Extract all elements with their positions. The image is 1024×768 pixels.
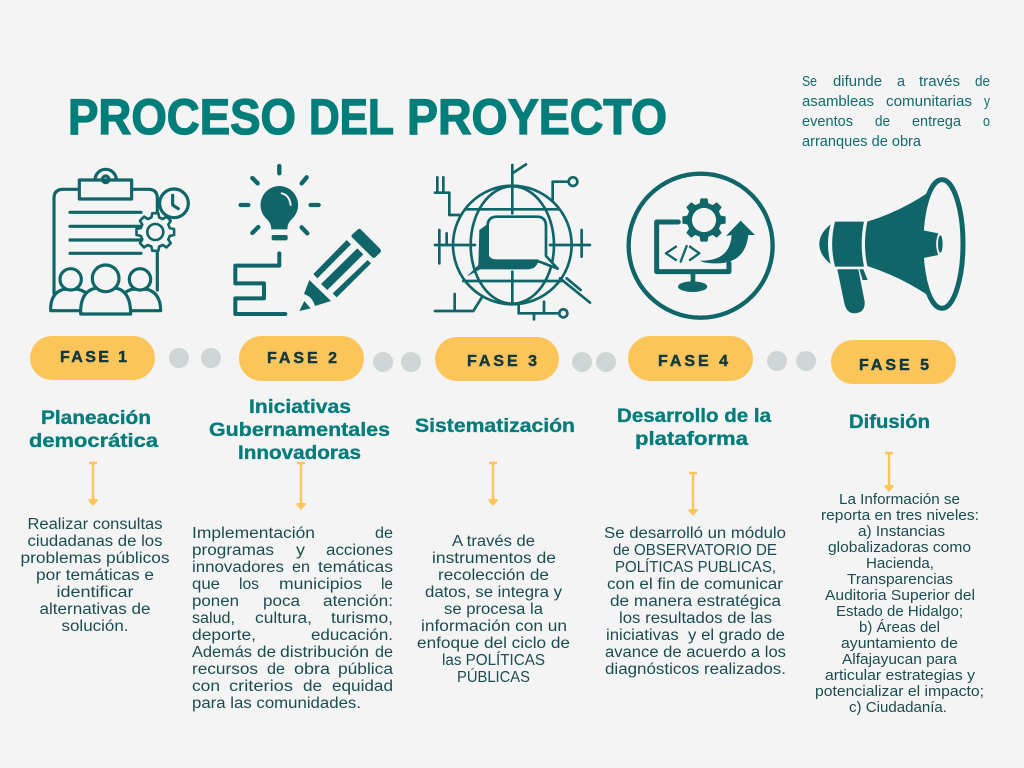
title: PROYECTO [407,89,667,145]
text block: fase 5 description: globalizadoras como [828,540,971,556]
heading: planeación democrática: democrática [29,430,158,452]
text block: fase 5 description: b) Áreas del [859,619,940,636]
text block: fase 2 description: pública [338,661,393,678]
panel: fase 3 [415,337,575,686]
heading: iniciativas gubernamentales innovadoras [209,396,390,464]
text block: fase 2 description: los [239,576,259,593]
text block: fase 4 description: iniciativas y el grado de [606,627,785,644]
text block: fase 1 description: alternativas de [40,601,150,618]
text block: fase 1 description: ciudadanas de los [28,533,163,550]
icon: clipboard with people [51,169,188,314]
text block: fase 3 description: datos, se integra y [425,584,562,601]
text block: fase 2 description: temáticas [318,559,393,576]
heading: desarrollo de la plataforma: Desarrollo de la [617,405,771,427]
text block: fase 4 description: diagnósticos realizados. [605,661,786,678]
text block: fase 2 description: para las comunidades. [192,695,361,712]
text block: difusión note: de [875,114,890,130]
heading: iniciativas gubernamentales innovadoras: Gubernamentales [209,419,390,441]
text block: fase 5 description: articular estrategias y [825,668,976,684]
panel: fase 4 [604,336,786,678]
heading: planeación democrática: Planeación [41,407,151,429]
text block: fase 4 description: POLÍTICAS PUBLICAS, [615,559,776,576]
text block: fase 2 description: y [296,542,305,559]
text block: fase 5 description: ayuntamiento de [841,636,958,652]
text block: fase 5 description: La Información se [839,492,960,508]
panel: fase 5 [815,340,984,716]
pill: fase 5: FASE 5 [859,357,929,374]
pill: fase 3: FASE 3 [467,353,537,370]
heading: sistematización: Sistematización [415,415,575,437]
title [68,89,667,145]
text block: fase 2 description: de [375,525,393,542]
heading: planeación democrática [29,407,158,452]
text block: fase 2 description: poca [263,593,300,610]
text block: fase 2 description: cultura, [255,610,312,627]
text block: fase 3 description: información con un [421,618,567,635]
text block: difusión note: entrega [912,114,962,130]
title: DEL [309,89,394,145]
icon: monitor with gear in a circle [629,174,773,318]
text block: fase 3 description [417,533,570,686]
text block: difusión note: a [897,74,906,90]
text block: fase 5 description: Hacienda, [866,556,934,572]
text block: fase 2 description: salud, [192,610,235,627]
text block: fase 2 description: que [192,576,220,593]
text block: difusión note: Se [802,74,817,90]
text block: difusión note: difunde [833,74,882,90]
text block: fase 2 description: Además [192,644,252,661]
text block: fase 2 description: innovadores [192,559,284,576]
heading: difusión: Difusión [849,411,930,433]
phase connector dots [169,348,816,372]
text block: fase 2 description: de [375,644,393,661]
text block: difusión note: través [919,74,960,90]
text block: difusión note: asambleas [802,94,874,110]
text block: fase 2 description: recursos [192,661,258,678]
heading: desarrollo de la plataforma [617,405,771,450]
text block: difusión note: eventos [802,114,853,130]
text block: fase 2 description: distribución [280,644,369,661]
text block: fase 4 description: avance de acuerdo a los [605,644,786,661]
text block: fase 2 description: turismo, [331,610,393,627]
icon: globe with speech bubble [435,164,590,319]
text block: difusión note: de [975,74,990,90]
arrow [296,463,306,510]
text block: fase 2 description: de [303,678,322,695]
text block: fase 1 description [20,516,170,635]
text block: fase 4 description: los resultados de las [619,610,772,627]
text block: difusión note: comunitarias [886,94,972,110]
text block: fase 2 description: criterios [229,678,293,695]
heading: desarrollo de la plataforma: plataforma [635,428,748,450]
arrow [88,463,98,506]
text block: fase 5 description: Alfajayucan para [842,652,958,668]
text block: fase 5 description: reporta en tres niveles: [821,508,979,524]
text block: fase 4 description: de OBSERVATORIO DE [613,542,777,559]
text block: fase 1 description: identificar [56,584,134,601]
text block: fase 5 description [815,492,984,716]
icon: light bulb and pencil [235,166,381,314]
pill: fase 4: FASE 4 [658,353,728,370]
text block: difusión note: y [984,94,991,110]
arrow [688,473,698,516]
text block: fase 2 description: le [381,576,393,593]
text block: fase 2 description: equidad [332,678,393,695]
text block: fase 2 description: en [292,559,310,576]
text block: fase 3 description: enfoque del ciclo de [417,635,570,652]
text block: fase 2 description: de [257,644,276,661]
heading: iniciativas gubernamentales innovadoras: Iniciativas [249,396,351,418]
text block: fase 3 description: instrumentos de [432,550,556,567]
text block: fase 2 description: municipios [279,576,362,593]
text block: fase 1 description: problemas públicos [20,550,170,567]
text block: fase 2 description: ponen [192,593,239,610]
pill: fase 1 [30,336,155,380]
text block: fase 2 description: programas [192,542,274,559]
text block: difusión note: arranques de obra [802,134,922,150]
text block: difusión note: o [983,114,990,130]
text block: fase 2 description: atención: [323,593,393,610]
text block: fase 4 description: de manera estratégica [610,593,781,610]
text block: fase 5 description: Auditoria Superior del [825,588,975,604]
text block: fase 2 description: obra [294,661,330,678]
text block: fase 1 description: solución. [62,618,128,635]
text block: fase 4 description: con el fin de comunicar [607,576,783,593]
text block: fase 1 description: por temáticas e [36,567,154,584]
text block: fase 5 description: a) Instancias [858,524,945,540]
heading: iniciativas gubernamentales innovadoras: Innovadoras [238,442,361,464]
text block: fase 2 description: de [267,661,285,678]
text block: fase 3 description: las POLÍTICAS [442,652,545,669]
text block: fase 4 description: Se desarrolló un módulo [604,525,786,542]
text block: fase 3 description: PÚBLICAS [457,669,530,686]
text block: fase 5 description: potencializar el impacto; [815,684,984,700]
panel: fase 2 [192,336,393,712]
pill: fase 3 [435,337,559,381]
icon: megaphone [819,180,963,313]
text block: fase 5 description: Estado de Hidalgo; [836,604,963,620]
arrow [884,453,894,492]
text block: fase 2 description: Implementación [192,525,315,542]
text block: fase 2 description [192,525,393,712]
text block: fase 4 description [604,525,786,678]
pill: fase 4 [628,336,753,381]
text block: difusión note [802,74,991,150]
text block: fase 3 description: se procesa la [444,601,543,618]
text block: fase 5 description: Transparencias [847,572,953,588]
text block: fase 2 description: con [192,678,220,695]
text block: fase 3 description: A través de [452,533,535,550]
title: PROCESO [68,89,296,145]
text block: fase 2 description: educación. [311,627,393,644]
text block: fase 5 description: c) Ciudadanía. [849,700,947,716]
text block: fase 1 description: Realizar consultas [28,516,163,533]
text block: fase 2 description: deporte, [192,627,256,644]
text block: fase 2 description: acciones [326,542,393,559]
panel: fase 1 [20,336,170,635]
text block: fase 3 description: recolección de [438,567,549,584]
pill: fase 1: FASE 1 [60,349,127,366]
pill: fase 2: FASE 2 [267,350,337,367]
pill: fase 2 [239,336,364,381]
pill: fase 5 [831,340,956,384]
arrow [488,463,498,506]
